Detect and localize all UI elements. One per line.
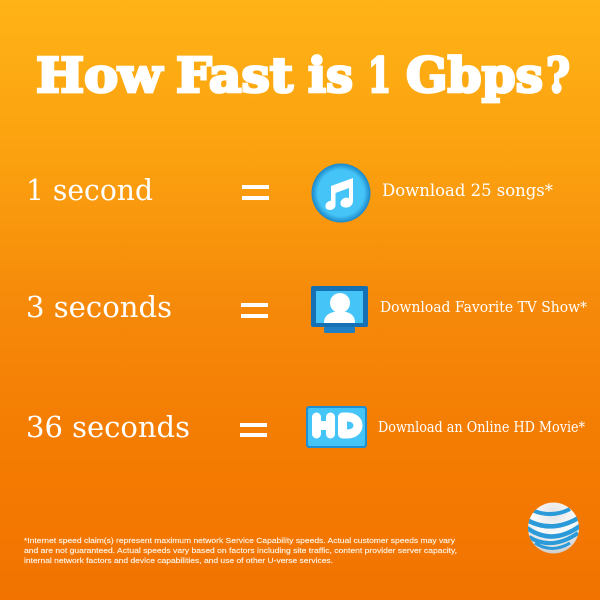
title: How <box>36 48 164 104</box>
icon: HD badge <box>306 406 367 448</box>
title <box>36 48 570 104</box>
icon: TV with person <box>311 286 368 333</box>
time label: 3 seconds: 3 seconds <box>26 290 172 324</box>
equals sign <box>241 303 268 318</box>
footnote: and are not guaranteed. Actual speeds vary based on factors including site traffic, content provider server capacity, <box>24 546 457 555</box>
footnote: *Internet speed claim(s) represent maximum network Service Capability speeds. Actual customer speeds may vary <box>24 536 455 545</box>
icon: music note <box>312 164 370 222</box>
equals sign <box>240 423 267 437</box>
description: download 25 songs: Download 25 songs* <box>382 181 553 200</box>
title: ? <box>546 48 570 104</box>
row 3: 36 seconds equals HD movie <box>26 406 586 448</box>
row 2: 3 seconds equals TV show <box>26 286 587 333</box>
title: is <box>308 48 353 104</box>
title: 1 <box>368 48 391 104</box>
description: download favorite TV show: Download Favorite TV Show* <box>380 298 587 316</box>
time label: 36 seconds: 36 seconds <box>26 410 190 444</box>
title: Gbps <box>406 48 543 104</box>
time label: 1 second: 1 second <box>26 173 153 207</box>
row 1: 1 second equals 25 songs <box>26 164 553 222</box>
title: Fast <box>176 48 293 104</box>
equals sign <box>242 185 269 200</box>
footnote <box>24 536 457 565</box>
icon: AT&T globe logo <box>527 502 580 554</box>
footnote: internal network factors and device capabilities, and use of other U-verse services. <box>24 556 333 565</box>
